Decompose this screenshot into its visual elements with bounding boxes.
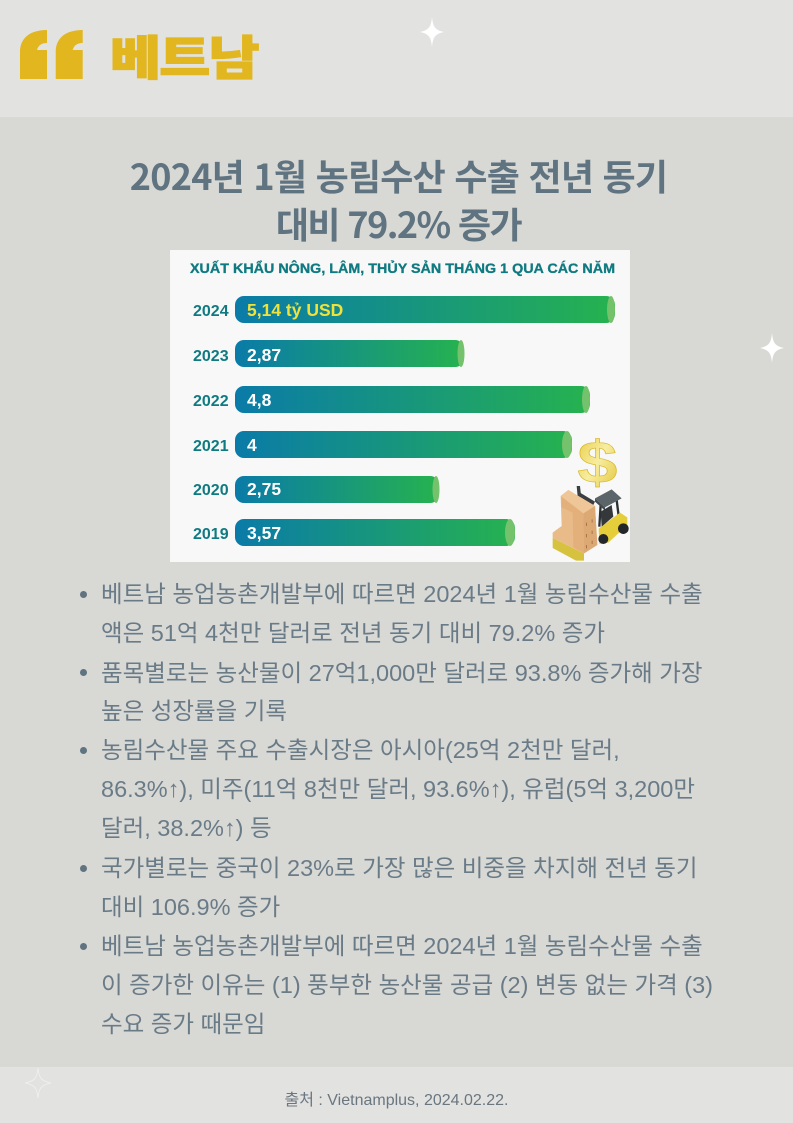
bar: 2020: [193, 476, 440, 503]
bar: 2024: [193, 296, 615, 323]
icon: sparkle footer: [25, 1068, 51, 1098]
bar: 2023: [193, 340, 464, 367]
source footer: 출처 : Vietnamplus, 2024.02.22.: [285, 1092, 508, 1109]
bullet 5: [80, 933, 713, 1037]
bullet 4: 대비 106.9% 증가: [101, 894, 280, 920]
bar: 2023: 2,87: [247, 345, 281, 365]
bar: 2019: 2019: [193, 526, 229, 543]
bar: 2021: 4: [247, 435, 257, 455]
bar: 2021: [193, 431, 572, 458]
bullet 3: 86.3%↑), 미주(11억 8천만 달러, 93.6%↑), 유럽(5억 3,200만: [101, 776, 695, 802]
bullet 2: 높은 성장률을 기록: [101, 698, 287, 724]
bar: 2019: 3,57: [247, 523, 281, 543]
bullet 2: [80, 660, 703, 724]
bar: 2024: 2024: [193, 303, 229, 320]
bar: 2024: 5,14 tỷ USD: [247, 300, 343, 320]
main heading: [130, 149, 667, 249]
bar: 2023: 2023: [193, 348, 229, 365]
icon: forklift with dollar sign: $: [577, 429, 617, 496]
main heading: 대비 79.2% 증가: [276, 197, 521, 249]
bullet 4: [80, 855, 698, 920]
bullet 4: 국가별로는 중국이 23%로 가장 많은 비중을 차지해 전년 동기: [101, 855, 698, 881]
bar: 2019: [193, 519, 515, 546]
bar: 2022: [193, 386, 590, 413]
bullet 5: 베트남 농업농촌개발부에 따르면 2024년 1월 농림수산물 수출: [101, 933, 703, 959]
icon: sparkle top: [420, 18, 444, 46]
chart title: XUẤT KHẨU NÔNG, LÂM, THỦY SẢN THÁNG 1 QUA CÁC NĂM: [190, 261, 615, 276]
bar chart image panel: [170, 250, 630, 562]
bullet 3: 농림수산물 주요 수출시장은 아시아(25억 2천만 달러,: [101, 737, 620, 763]
bullet 3: [80, 737, 695, 841]
bullet 1: [80, 581, 703, 646]
bar: 2020: 2020: [193, 482, 229, 499]
bullet 1: 베트남 농업농촌개발부에 따르면 2024년 1월 농림수산물 수출: [101, 581, 703, 607]
bar: 2022: 4,8: [247, 390, 272, 410]
bar: 2020: 2,75: [247, 479, 281, 499]
icon: sparkle right: [760, 334, 784, 362]
main heading: 2024년 1월 농림수산 수출 전년 동기: [130, 149, 667, 201]
bullet 5: 수요 증가 때문임: [101, 1011, 265, 1037]
bullet list: [80, 581, 713, 1037]
footer band: [0, 1067, 793, 1123]
header title: 베트남: [110, 20, 258, 89]
bullet 5: 이 증가한 이유는 (1) 풍부한 농산물 공급 (2) 변동 없는 가격 (3): [101, 972, 713, 998]
bar: 2022: 2022: [193, 393, 229, 410]
bullet 1: 액은 51억 4천만 달러로 전년 동기 대비 79.2% 증가: [101, 620, 605, 646]
bullet 3: 달러, 38.2%↑) 등: [101, 815, 272, 841]
header band: [0, 0, 793, 117]
bullet 2: 품목별로는 농산물이 27억1,000만 달러로 93.8% 증가해 가장: [101, 660, 703, 686]
icon: quotation mark: [20, 30, 83, 79]
bar: 2021: 2021: [193, 438, 229, 455]
icon: forklift with dollar sign: [553, 429, 629, 561]
